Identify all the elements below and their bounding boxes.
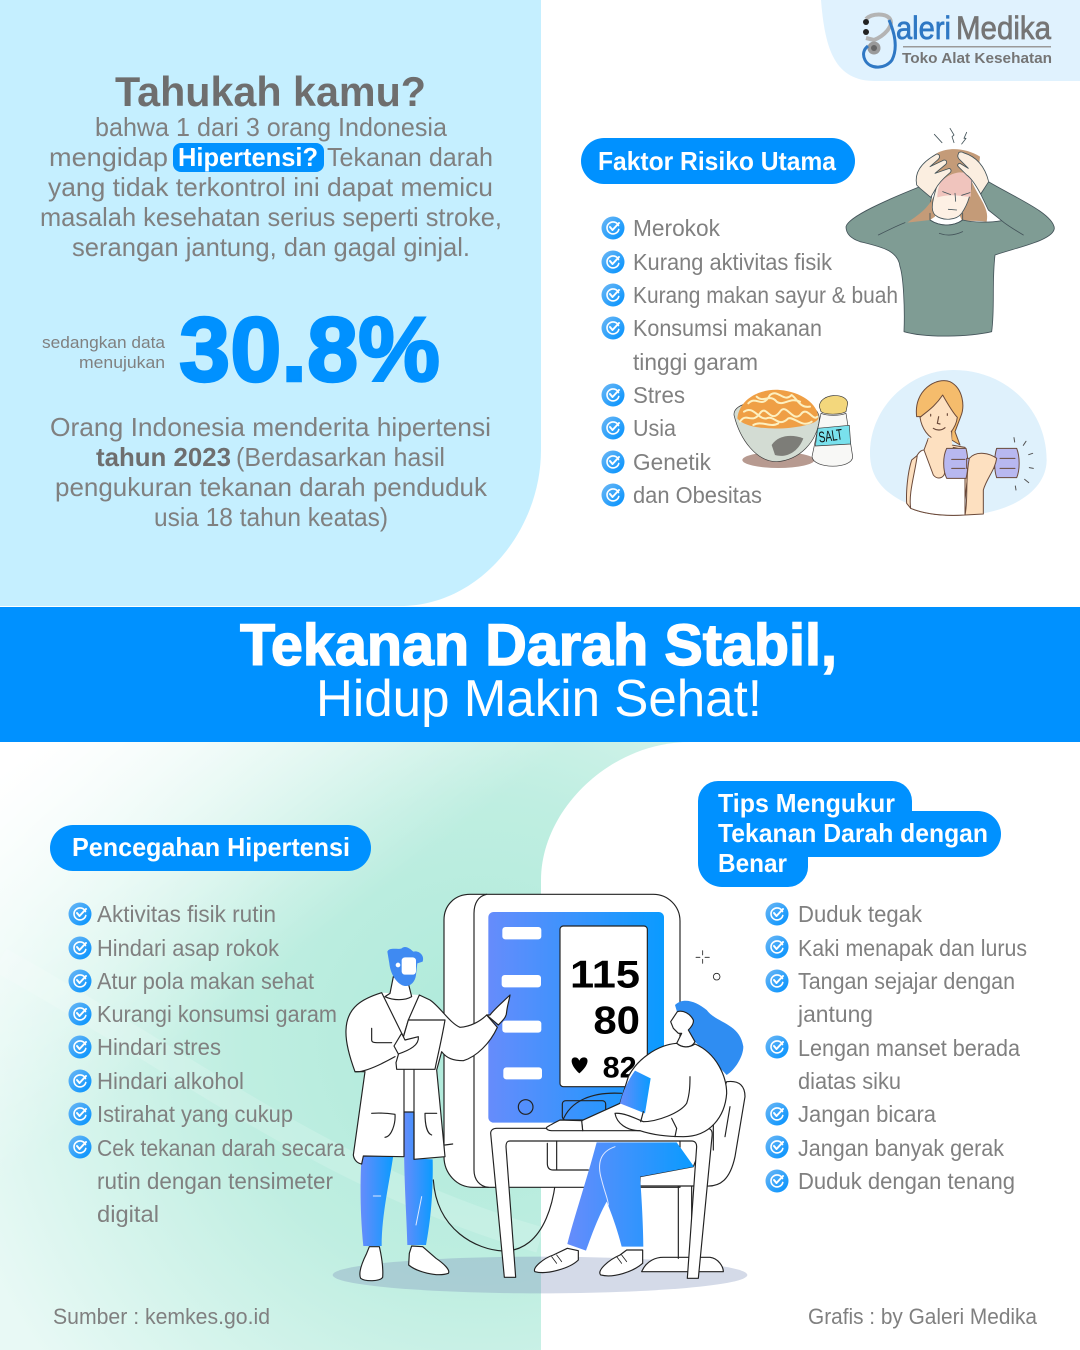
list: prevention: Kurangi konsumsi garam (97, 1001, 337, 1027)
heading pill: Faktor Risiko Utama: Faktor Risiko Utama (598, 146, 837, 176)
list: risk factors: Kurang aktivitas fisik (633, 249, 832, 275)
text block: intro paragraph: serangan jantung, dan gagal ginjal. (72, 232, 470, 262)
graphic credit: Grafis : by Galeri Medika (808, 1304, 1038, 1329)
banner subtitle: Hidup Makin Sehat! (316, 670, 762, 728)
list: measurement tips: Duduk tegak (798, 901, 922, 927)
list: risk factors: tinggi garam (633, 349, 758, 375)
list: risk factors: Kurang makan sayur & buah (633, 282, 898, 308)
text block: intro paragraph: yang tidak terkontrol ini dapat memicu (48, 172, 493, 202)
list: measurement tips: Lengan manset berada (798, 1035, 1020, 1061)
shoes (534, 1248, 643, 1276)
list: measurement tips: Tangan sejajar dengan (798, 968, 1015, 994)
list: prevention: rutin dengan tensimeter (97, 1168, 333, 1194)
patient (567, 1001, 743, 1251)
heading pill: Tips Mengukur: Tekanan Darah dengan (718, 818, 988, 848)
illustration: woman lifting dumbbell (870, 370, 1047, 515)
patient torso and arm (547, 1043, 727, 1137)
list: risk factors (602, 215, 898, 508)
list: measurement tips: Jangan banyak gerak (798, 1135, 1004, 1161)
heading pill: Tips Mengukur: Benar (718, 848, 787, 878)
text block: statistic description: Orang Indonesia menderita hipertensi (50, 412, 491, 442)
logo: Galeri Medika: Medika (956, 10, 1051, 46)
heading pill: Pencegahan Hipertensi (50, 825, 371, 871)
blood pressure monitor: 115 (570, 953, 640, 996)
banner: blue headline band (0, 607, 1080, 742)
list: risk factors: Genetik (633, 449, 711, 475)
text block: intro paragraph: Hipertensi? (178, 142, 318, 172)
list: prevention: Cek tekanan darah secara (97, 1135, 345, 1161)
list: prevention: digital (97, 1201, 159, 1227)
list: prevention: Hindari alkohol (97, 1068, 244, 1094)
text block: statistic description: tahun 2023 (96, 442, 231, 472)
list: measurement tips: diatas siku (798, 1068, 901, 1094)
list: risk factors: Usia (633, 415, 676, 441)
list: measurement tips: Kaki menapak dan lurus (798, 935, 1027, 961)
statistic: 30.8 percent: sedangkan data (42, 333, 166, 352)
text block: statistic description (50, 412, 491, 532)
banner title: Tekanan Darah Stabil, (240, 613, 837, 678)
logo: Galeri Medika: Toko Alat Kesehatan (902, 51, 1052, 67)
blood pressure monitor: 82 (603, 1051, 637, 1084)
text block: intro paragraph: masalah kesehatan serius seperti stroke, (40, 202, 502, 232)
text block: intro paragraph: mengidap (49, 142, 168, 172)
heading pill: Pencegahan Hipertensi: Pencegahan Hipertensi (72, 832, 350, 862)
list: prevention: Atur pola makan sehat (97, 968, 315, 994)
list: risk factors: Stres (633, 382, 685, 408)
statistic: 30.8 percent: menujukan (79, 353, 165, 372)
source credit: Sumber : kemkes.go.id (53, 1304, 270, 1329)
illustration: noodle bowl and salt shaker: SALT (818, 426, 844, 447)
doctor (346, 947, 510, 1281)
blood pressure monitor (433, 894, 720, 1251)
panel: did you know intro text (40, 68, 502, 262)
text block: statistic description: usia 18 tahun keatas) (154, 502, 388, 532)
ground shadow (333, 1257, 747, 1293)
illustration: doctor, patient and blood pressure monitor (333, 894, 747, 1293)
illustration: woman with headache (846, 128, 1054, 336)
list: prevention: Aktivitas fisik rutin (97, 901, 276, 927)
heading pill: Faktor Risiko Utama (581, 138, 855, 184)
text block: intro paragraph: Tekanan darah (327, 142, 493, 172)
list: prevention: Istirahat yang cukup (97, 1101, 293, 1127)
heading: Tahukah kamu: Tahukah kamu? (115, 68, 426, 115)
list: risk factors: Merokok (633, 215, 720, 241)
list: prevention: Hindari stres (97, 1034, 221, 1060)
statistic: 30.8 percent (42, 299, 440, 401)
blood pressure monitor: 80 (593, 999, 640, 1042)
text block: intro paragraph (40, 112, 502, 262)
heading pill: Tips Mengukur: Tips Mengukur (718, 788, 895, 818)
panel: top-left light blue background (0, 0, 541, 606)
text block: statistic description: (Berdasarkan hasil (236, 442, 445, 472)
list: measurement tips (766, 901, 1027, 1194)
text block: statistic description: pengukuran tekanan darah penduduk (55, 472, 488, 502)
list: prevention (68, 901, 345, 1227)
panel: lower mint background (0, 742, 1080, 1350)
heading pill: Tips Mengukur (698, 781, 1001, 887)
list: measurement tips: Jangan bicara (798, 1101, 936, 1127)
logo: Galeri Medika (821, 0, 1080, 81)
list: measurement tips: jantung (797, 1001, 873, 1027)
logo: Galeri Medika: aleri (896, 10, 951, 46)
chair (640, 1081, 745, 1272)
list: prevention: Hindari asap rokok (97, 935, 279, 961)
illustration: noodle bowl and salt shaker (734, 390, 853, 468)
statistic: 30.8 percent: 30.8% (179, 299, 440, 401)
table (491, 1128, 712, 1278)
list: measurement tips: Duduk dengan tenang (798, 1168, 1015, 1194)
list: risk factors: Konsumsi makanan (633, 315, 822, 341)
list: risk factors: dan Obesitas (633, 482, 762, 508)
text block: intro paragraph: bahwa 1 dari 3 orang Indonesia (95, 112, 448, 142)
